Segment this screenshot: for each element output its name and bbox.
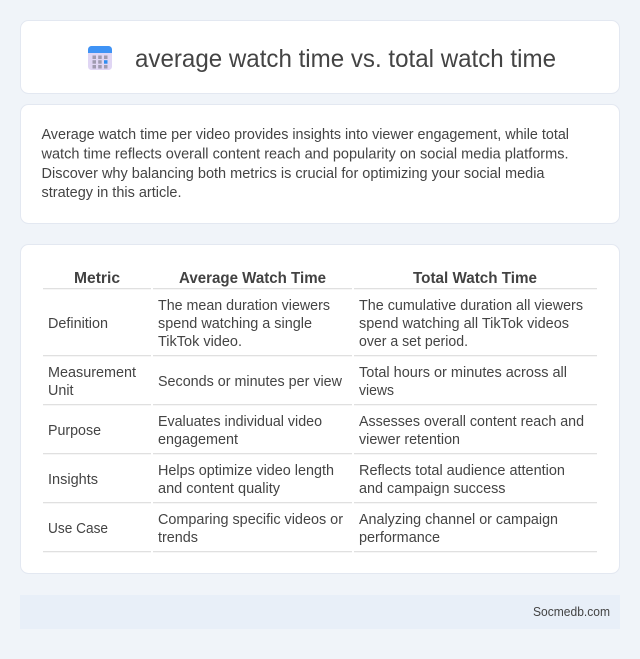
- row: purpose: engagement: [158, 432, 238, 448]
- row: definition: spend watching a single: [158, 316, 312, 332]
- row: definition: spend watching all TikTok videos: [359, 316, 569, 332]
- row: definition: The mean duration viewers: [158, 298, 330, 314]
- row: measurement unit: views: [359, 383, 394, 399]
- row: purpose: [48, 414, 584, 448]
- row: definition: TikTok video.: [158, 334, 242, 350]
- row: use case: performance: [359, 530, 440, 546]
- icon: calendar: [88, 46, 112, 70]
- row: measurement unit: Measurement: [48, 365, 136, 381]
- title: average watch time vs. total watch time: [135, 45, 556, 73]
- footer: [20, 595, 620, 629]
- row: use case: [48, 512, 558, 546]
- row: measurement unit: Total hours or minutes across all: [359, 365, 567, 381]
- row: measurement unit: Seconds or minutes per view: [158, 374, 343, 390]
- row: use case: Analyzing channel or campaign: [359, 512, 558, 528]
- row: measurement unit: Unit: [48, 383, 74, 399]
- table header: Metric: [74, 270, 120, 287]
- row: use case: trends: [158, 530, 198, 546]
- intro text: Average watch time per video provides insights into viewer engagement, while total: [42, 127, 569, 143]
- row: insights: Helps optimize video length: [158, 463, 334, 479]
- row: purpose: Purpose: [48, 423, 101, 439]
- row: insights: [48, 463, 565, 497]
- row: insights: Reflects total audience attention: [359, 463, 565, 479]
- table header: Average Watch Time: [179, 270, 326, 287]
- intro text: [40, 127, 569, 201]
- row: insights: and content quality: [158, 481, 281, 497]
- intro text: watch time reflects overall content reach and popularity on social media platforms.: [40, 146, 569, 162]
- row: measurement unit: [48, 365, 567, 399]
- row: insights: and campaign success: [359, 481, 506, 497]
- table header: [74, 270, 537, 287]
- panel: comparison table: [20, 244, 620, 574]
- panel: intro: [20, 104, 620, 224]
- row: purpose: viewer retention: [359, 432, 460, 448]
- row: definition: Definition: [48, 316, 108, 332]
- row: purpose: Evaluates individual video: [158, 414, 322, 430]
- intro text: Discover why balancing both metrics is crucial for optimizing your social media: [42, 166, 544, 182]
- table header: Total Watch Time: [413, 270, 537, 287]
- row: definition: The cumulative duration all viewers: [359, 298, 583, 314]
- footer source text: Socmedb.com: [533, 605, 610, 619]
- row: use case: Use Case: [48, 521, 108, 537]
- row: purpose: Assesses overall content reach and: [359, 414, 584, 430]
- row: use case: Comparing specific videos or: [158, 512, 343, 528]
- row: definition: [48, 298, 583, 350]
- intro text: strategy in this article.: [42, 185, 182, 201]
- row: definition: over a set period.: [359, 334, 468, 350]
- row: insights: Insights: [48, 472, 98, 488]
- panel: title card: [20, 20, 620, 94]
